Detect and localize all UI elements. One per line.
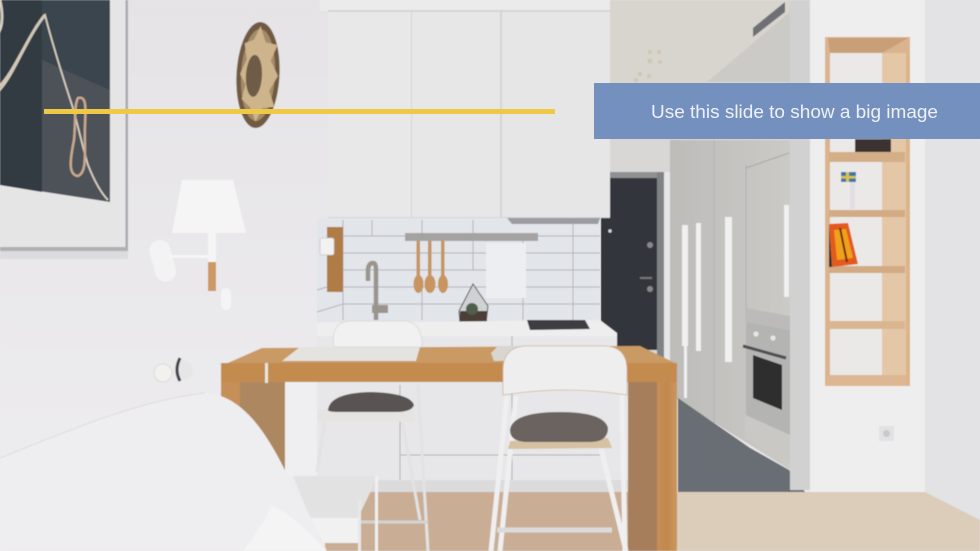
wooden board [320,227,343,292]
knife rail [405,233,538,241]
woven wall basket [234,21,282,129]
dried flowers [634,50,662,82]
side table [293,476,378,551]
wooden spoons [414,241,448,293]
backsplash tiles [317,218,600,322]
wall lamp [147,180,246,310]
wall cabinets [320,0,610,218]
wardrobe handles [682,205,789,398]
table top [221,346,677,383]
framed artwork [0,0,128,251]
wall switches [154,358,193,382]
oven [743,322,790,463]
wood floor [325,492,980,551]
left wall [0,0,330,551]
countertop [317,320,617,336]
socket [879,426,894,441]
wall column [790,0,980,520]
clock on shelf [855,139,891,152]
niche shelves [825,37,910,386]
sofa [0,393,327,551]
table leg left [221,382,285,475]
front stool [491,346,627,551]
hob [527,320,590,330]
decorative yellow line [44,109,555,114]
wardrobe fronts [670,140,790,470]
table leg right [628,378,677,551]
flag on shelf [841,172,856,209]
back stool [317,321,428,551]
lower cabinets [285,333,628,492]
placemats [282,346,560,361]
banner text: Use this slide to show a big image [651,101,938,122]
book on shelf [829,223,858,267]
faucet [368,263,388,320]
far hallway wall and ceiling [608,0,790,400]
entry door [601,172,670,400]
tile floor [678,398,805,492]
glass terrarium [459,284,488,323]
banner [594,83,980,139]
